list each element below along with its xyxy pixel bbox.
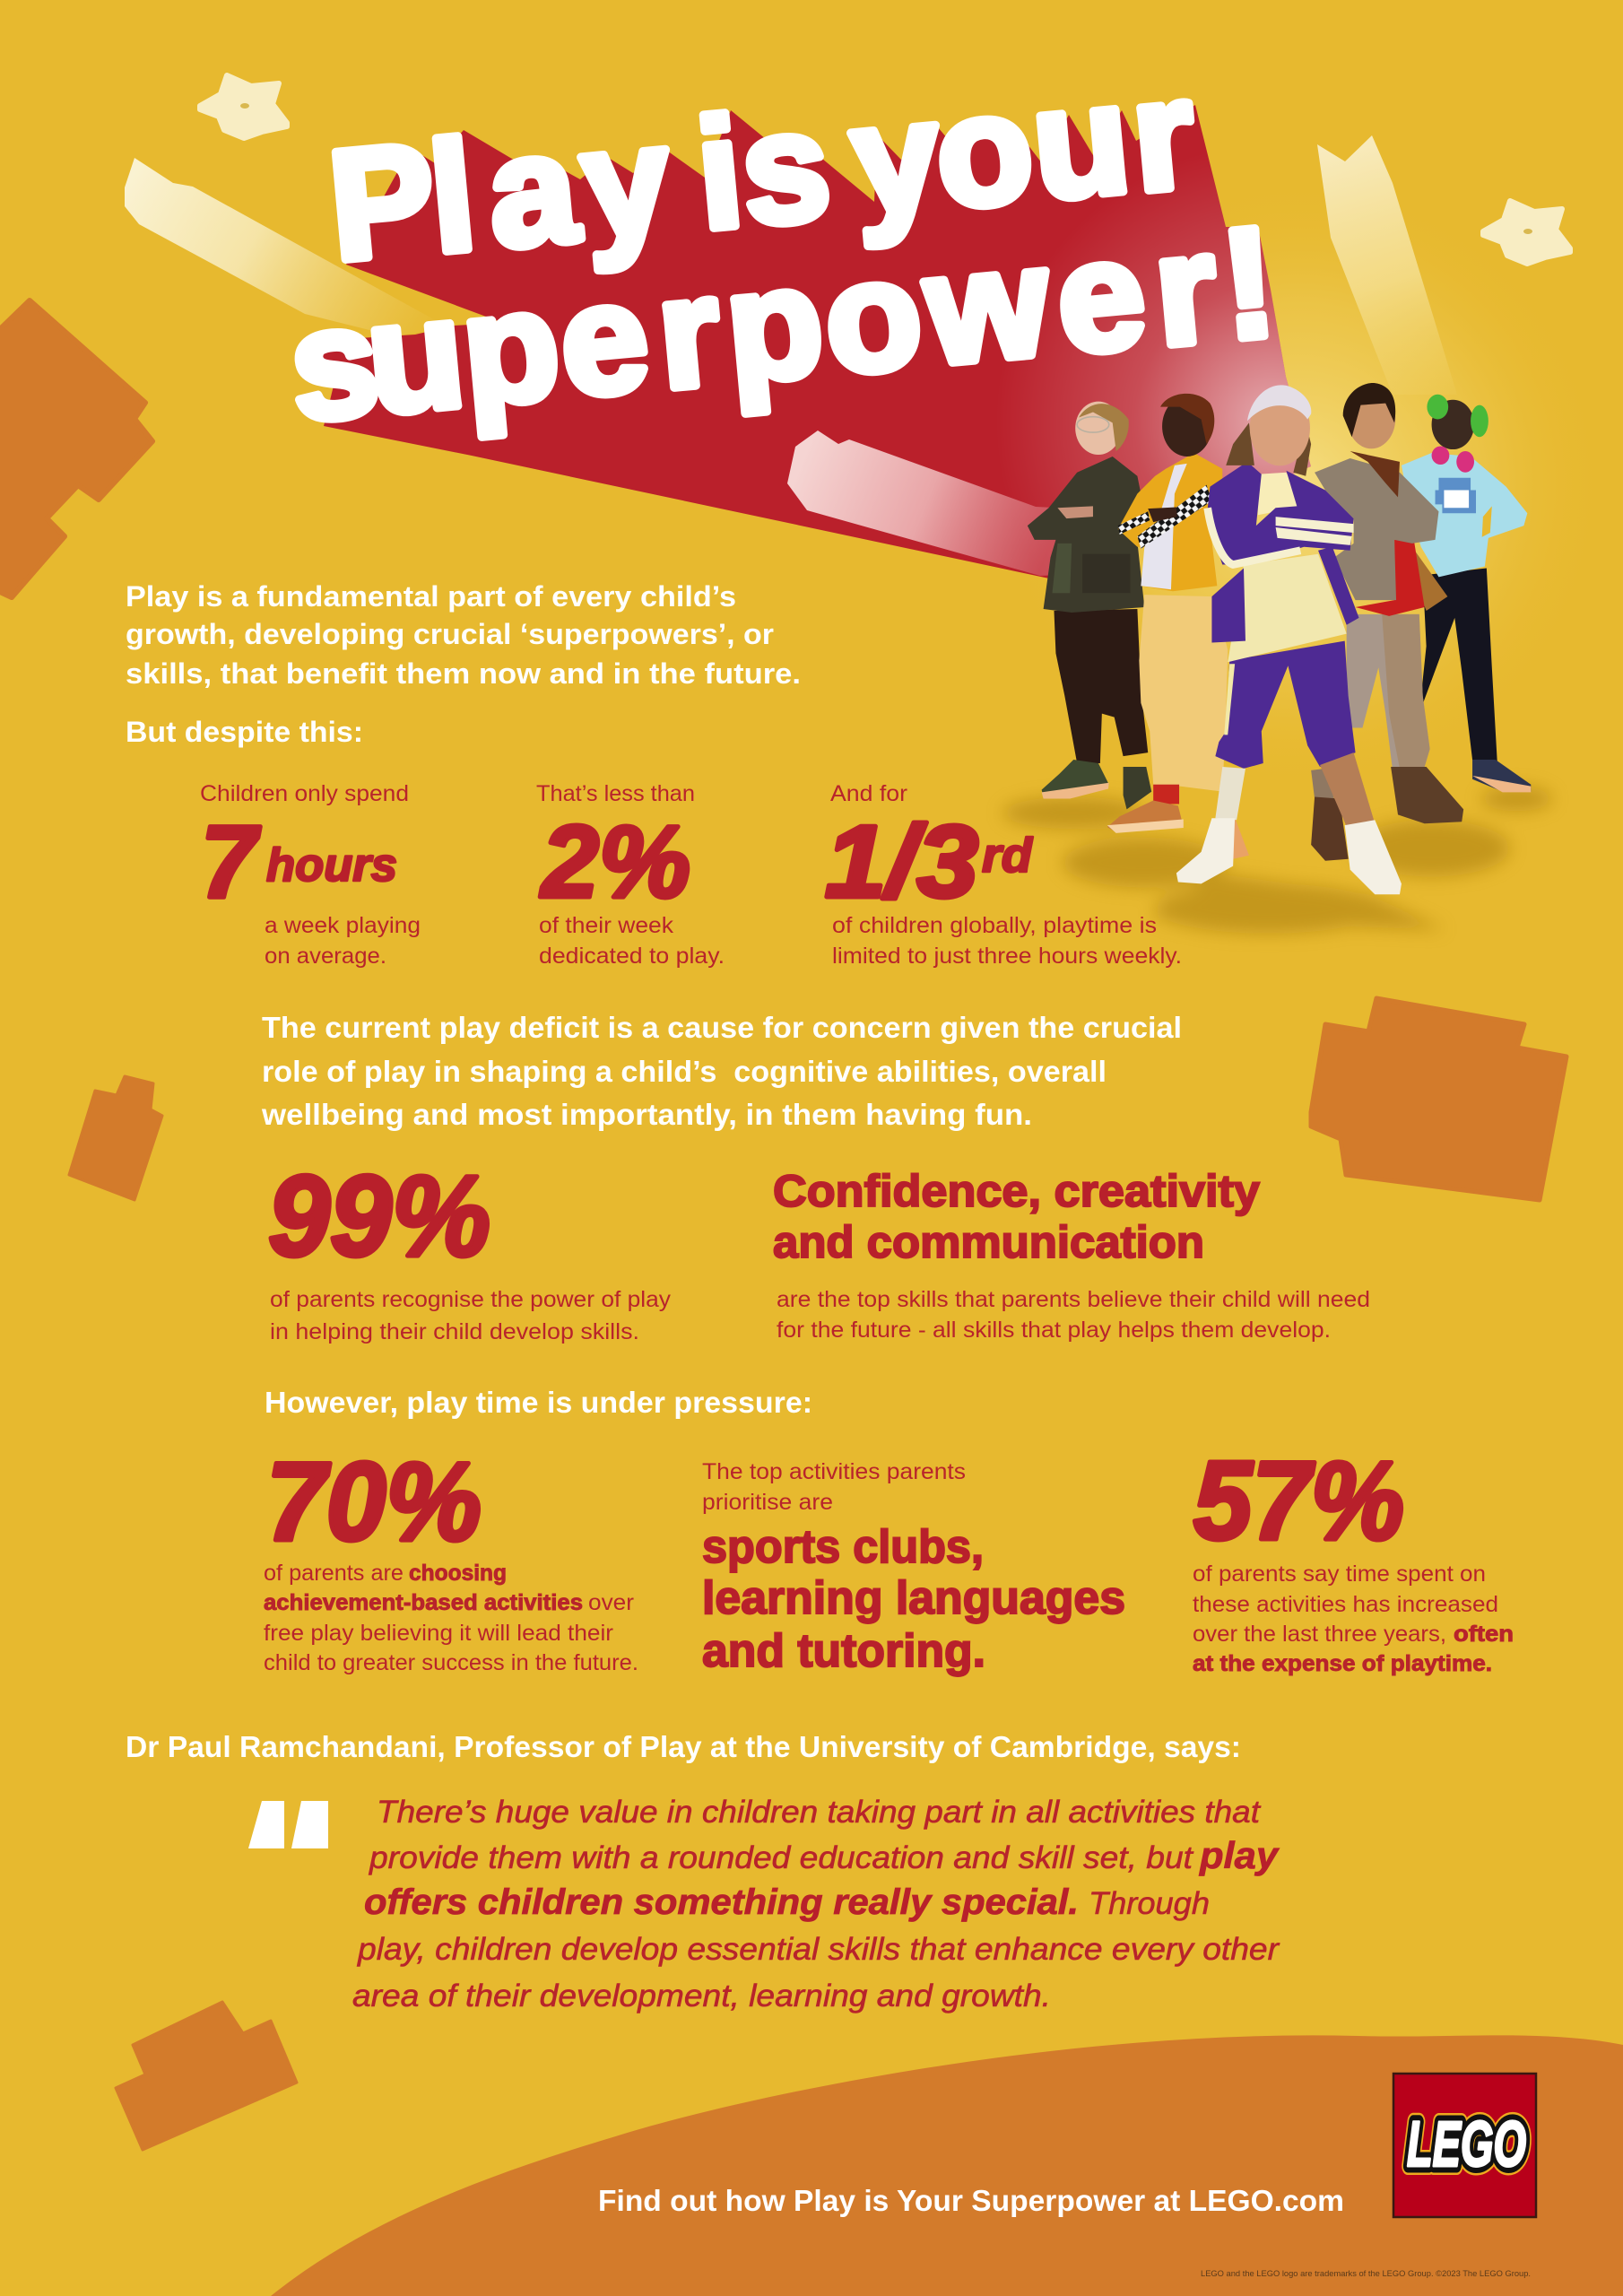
right light streak: [1317, 135, 1457, 395]
child 4: khaki jacket: [1311, 383, 1463, 861]
quote: Through: [1089, 1886, 1210, 1921]
decorative brick: bottom left: [116, 2002, 297, 2150]
glow behind children: [986, 179, 1623, 897]
child 2: yellow jacket: [1107, 394, 1249, 859]
title: [283, 45, 1282, 454]
stat: 1/3rd: rd: [982, 829, 1033, 883]
red beam behind title: [314, 105, 1311, 578]
stat: top skills: and communication: [773, 1217, 1204, 1267]
quote: There’s huge value in children taking part in all activities that: [377, 1795, 1261, 1830]
stat: 57%: 57%: [1193, 1439, 1404, 1563]
stat: 57%: [1193, 1439, 1514, 1676]
LEGO logo: LEGO: [1407, 2109, 1526, 2180]
stat: 57%: over the last three years,: [1193, 1622, 1446, 1647]
title: superpower!: [283, 193, 1282, 454]
stat: 57%: of parents say time spent on: [1193, 1561, 1486, 1587]
stat: 99%: of parents recognise the power of play: [270, 1287, 672, 1312]
stat: 2%: 2%: [540, 805, 690, 919]
stat: 7 hours: 7: [201, 805, 260, 919]
stat: 2%: That’s less than: [536, 781, 695, 806]
stat: 57%: at the expense of playtime.: [1193, 1651, 1492, 1676]
stat: 70%: free play believing it will lead their: [264, 1621, 613, 1646]
stat: top skills: for the future - all skills that play helps them develop.: [777, 1318, 1331, 1343]
stat: 70%: child to greater success in the future.: [264, 1650, 638, 1675]
stat: 99%: 99%: [268, 1152, 490, 1281]
stat: top activities: The top activities parents: [702, 1459, 966, 1484]
stat: 1/3rd: [825, 781, 1182, 969]
stat: 1/3rd: And for: [830, 781, 907, 806]
intro text: growth, developing crucial ‘superpowers’, or: [126, 618, 774, 650]
stat: 99%: [268, 1152, 672, 1344]
left light streak: [125, 158, 448, 336]
call to action: Find out how Play is Your Superpower at LEGO.com: [598, 2184, 1344, 2217]
LEGO logo: [1393, 2074, 1536, 2217]
stat: 70%: [264, 1440, 638, 1675]
stat: top skills: are the top skills that parents believe their child will need: [777, 1287, 1370, 1312]
beam highlight: [314, 105, 1311, 578]
stat: 70%: 70%: [266, 1440, 482, 1564]
stat: top activities: and tutoring.: [702, 1625, 985, 1677]
child 1: olive jacket: [1028, 402, 1151, 809]
title: Play is your: [323, 45, 1202, 293]
subheading: but despite this: But despite this:: [126, 716, 363, 748]
stat: 1/3rd: of children globally, playtime is: [832, 913, 1157, 938]
stat: 99%: in helping their child develop skills.: [270, 1319, 639, 1344]
quote: provide them with a rounded education and skill set, but: [369, 1840, 1193, 1875]
star: top right: [1483, 201, 1570, 264]
stat: 57%: often: [1454, 1622, 1514, 1647]
legal line: LEGO and the LEGO logo are trademarks of the LEGO Group. ©2023 The LEGO Group.: [1201, 2269, 1531, 2279]
quote: play: [1199, 1834, 1280, 1876]
intro text: Play is a fundamental part of every child’s: [126, 580, 736, 613]
play deficit paragraph: The current play deficit is a cause for concern given the crucial: [262, 1011, 1182, 1044]
stat: 7 hours: Children only spend: [200, 781, 409, 806]
quote attribution: Dr Paul Ramchandani, Professor of Play at the University of Cambridge, says:: [126, 1730, 1241, 1763]
intro text: skills, that benefit them now and in the future.: [126, 657, 801, 690]
children group photo illustration: [1002, 383, 1552, 934]
stat: top skills: Confidence, creativity: [773, 1166, 1260, 1216]
stat: top skills: [773, 1166, 1370, 1343]
quote: area of their development, learning and growth.: [352, 1979, 1051, 2013]
LEGO logo: LEGO: [1407, 2109, 1526, 2180]
stat: 57%: these activities has increased: [1193, 1592, 1498, 1617]
floor shadows: [1002, 787, 1552, 934]
decorative brick: left: [0, 300, 152, 597]
quote: offers children something really special.: [364, 1883, 1079, 1922]
decorative brick: large right: [1311, 998, 1567, 1200]
quote: play, children develop essential skills that enhance every other: [357, 1932, 1280, 1967]
stat: 2%: [536, 781, 725, 969]
quote: [352, 1795, 1280, 2013]
stat: top activities: [702, 1459, 1125, 1677]
subheading: however: However, play time is under pressure:: [265, 1386, 812, 1419]
stat: 70%: of parents are: [264, 1561, 404, 1586]
stat: 7 hours: hours: [266, 839, 397, 891]
footer orange curve: [271, 2035, 1623, 2296]
stat: 1/3rd: 1/3: [825, 805, 978, 919]
stat: top activities: sports clubs,: [702, 1521, 984, 1573]
stat: 70%: over: [588, 1590, 634, 1615]
stat: top activities: prioritise are: [702, 1490, 833, 1515]
play deficit paragraph: role of play in shaping a child’s cognitive abilities, overall: [262, 1055, 1107, 1088]
stat: 70%: choosing: [409, 1561, 507, 1586]
stat: 2%: of their week: [539, 913, 674, 938]
star: top left: [200, 75, 287, 138]
stat: 7 hours: [200, 781, 421, 969]
icon: quotation mark: [248, 1801, 328, 1848]
play deficit paragraph: [261, 1011, 1182, 1131]
intro text: [126, 580, 801, 690]
child 3: purple tracksuit: [1176, 385, 1402, 894]
decorative brick: small left: [69, 1076, 162, 1200]
stat: 1/3rd: limited to just three hours weekly.: [832, 944, 1182, 969]
middle light streak: [787, 430, 1076, 576]
stat: 70%: achievement-based activities: [264, 1590, 583, 1615]
child 5: blue sweater: [1402, 395, 1531, 792]
stat: 2%: dedicated to play.: [539, 944, 725, 969]
LEGO logo: LEGO: [1407, 2109, 1526, 2180]
stat: 7 hours: a week playing: [265, 913, 421, 938]
play deficit paragraph: wellbeing and most importantly, in them having fun.: [261, 1098, 1032, 1131]
stat: 7 hours: on average.: [265, 944, 386, 969]
stat: top activities: learning languages: [702, 1572, 1125, 1624]
